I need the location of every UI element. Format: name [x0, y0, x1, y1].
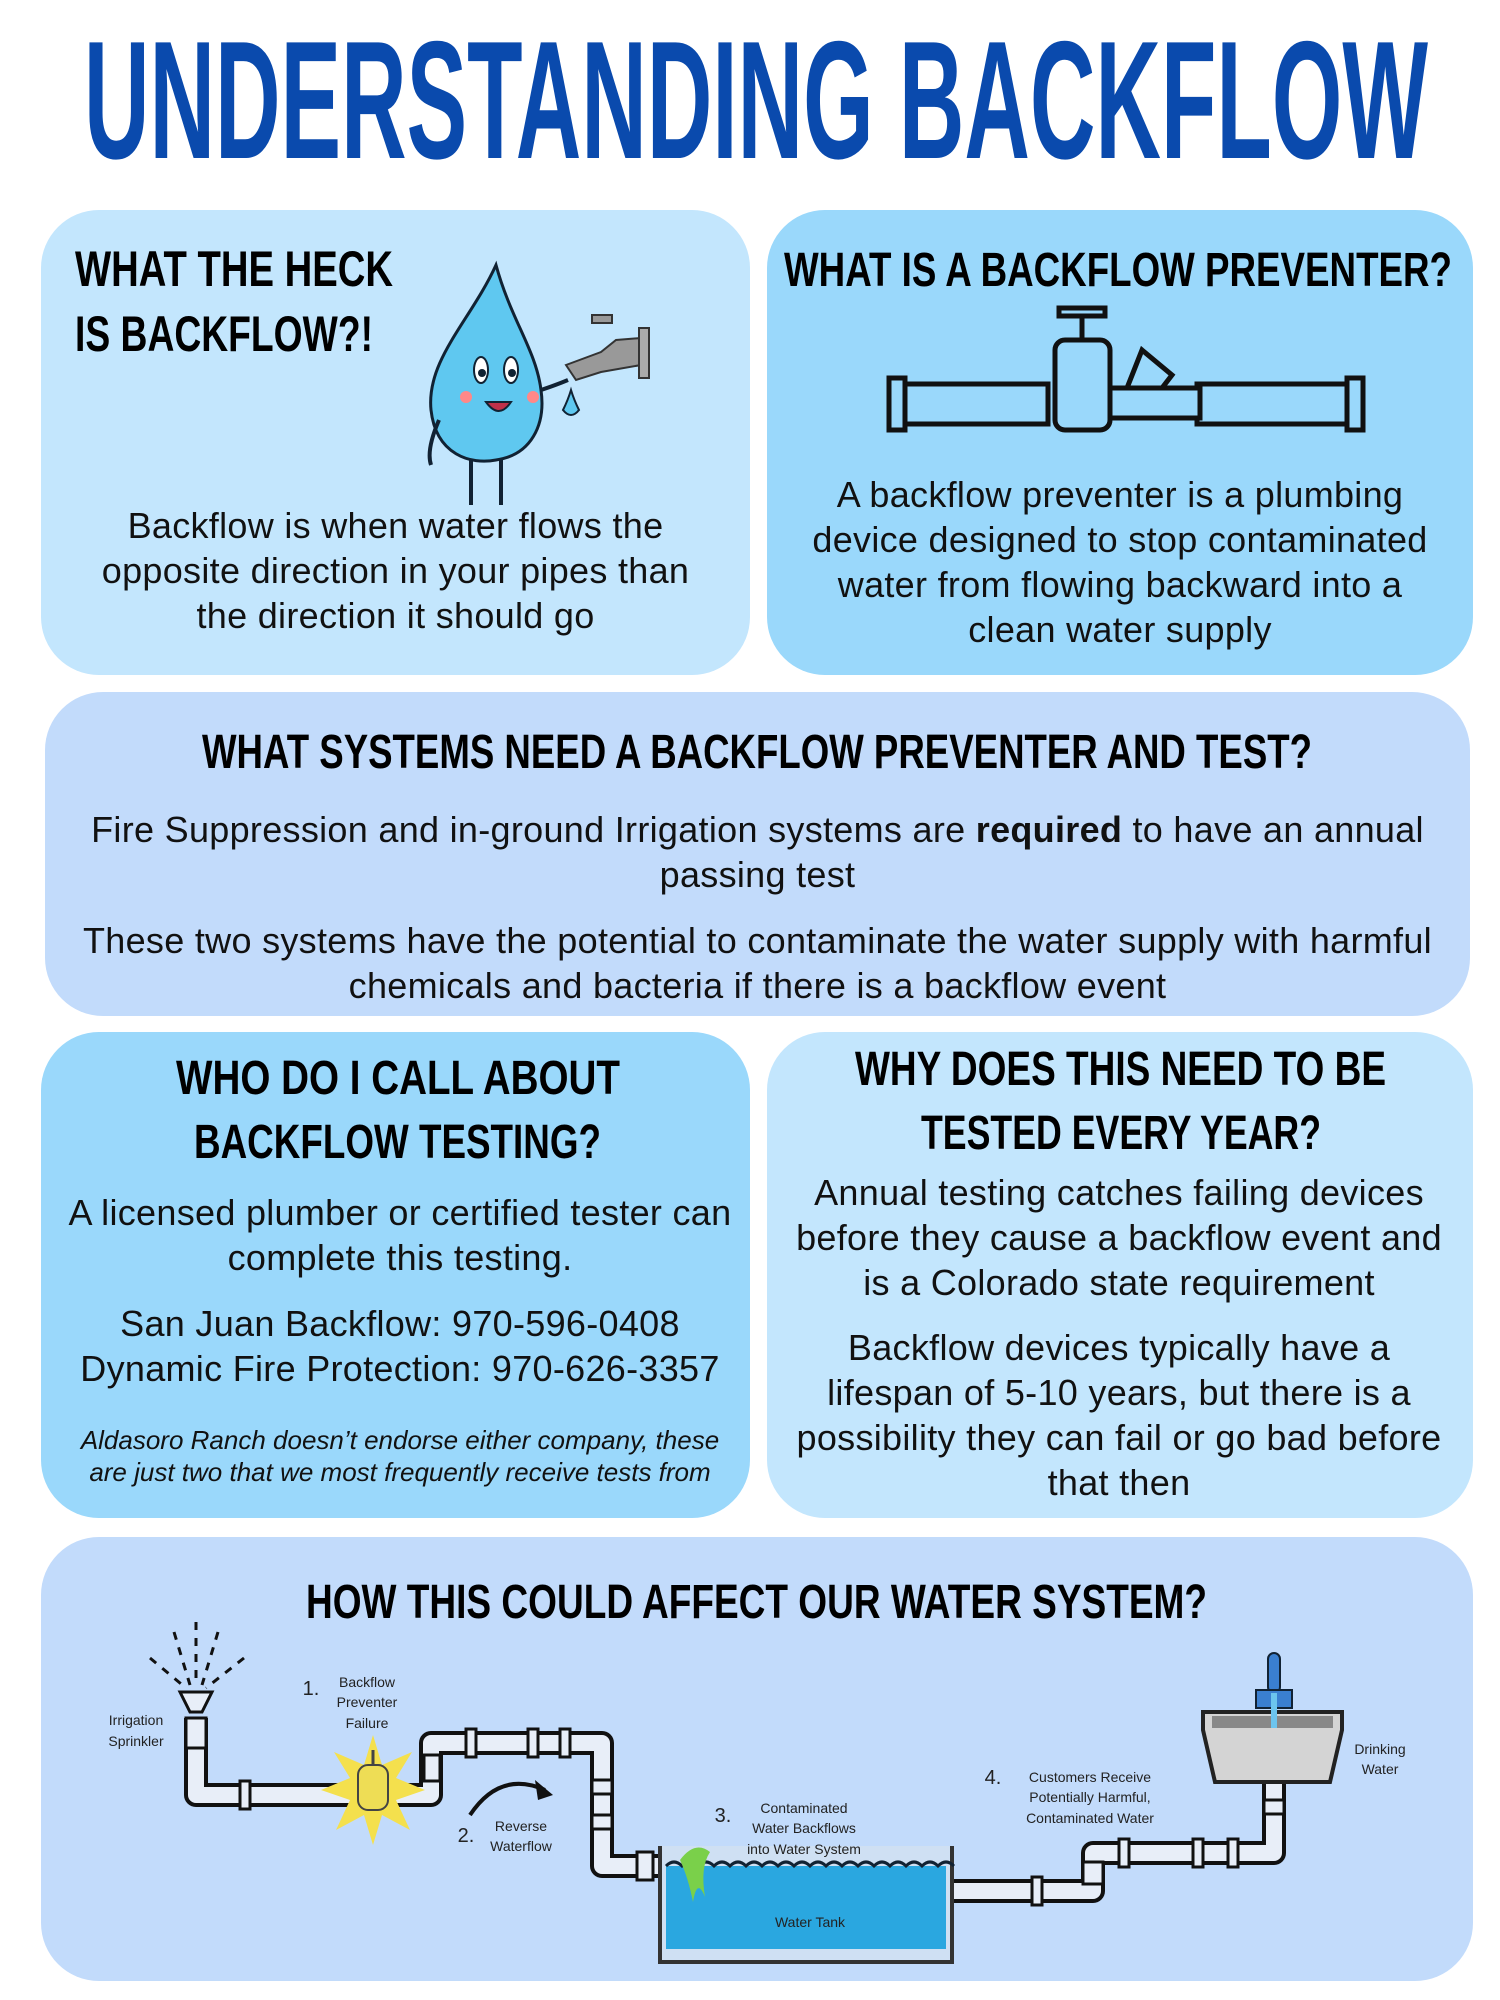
- text block: before they cause a backflow event and: [796, 1217, 1442, 1258]
- panel: what systems need: [45, 692, 1470, 1016]
- disclaimer: are just two that we most frequently receive tests from: [89, 1457, 711, 1487]
- disclaimer: [80, 1425, 719, 1487]
- labels: Failure: [346, 1715, 389, 1731]
- labels: Contaminated Water: [1026, 1810, 1154, 1826]
- heading: what the heck: IS BACKFLOW?!: [75, 306, 373, 362]
- labels: Drinking: [1354, 1741, 1406, 1757]
- text block: complete this testing.: [228, 1237, 572, 1278]
- text block: [91, 809, 1424, 895]
- text block: water from flowing backward into a: [838, 564, 1402, 605]
- panel: how this could affect: [41, 1537, 1473, 1981]
- text block: A backflow preventer is a plumbing: [837, 474, 1403, 515]
- labels: Sprinkler: [108, 1733, 164, 1749]
- labels: 4.: [985, 1767, 1001, 1789]
- text block: [83, 920, 1432, 1006]
- panel: who do I call: [41, 1032, 750, 1518]
- labels: Customers Receive: [1029, 1769, 1151, 1785]
- labels: Waterflow: [490, 1838, 553, 1854]
- icon: sprinkler spray: [150, 1622, 244, 1688]
- text block: that then: [1048, 1462, 1190, 1503]
- text block: [68, 1192, 731, 1278]
- heading: [784, 244, 1452, 432]
- labels: 3.: [715, 1805, 731, 1827]
- text block: clean water supply: [968, 609, 1272, 650]
- arrow: reverse flow: [470, 1780, 553, 1815]
- text block: chemicals and bacteria if there is a backflow event: [349, 965, 1166, 1006]
- labels: Water Tank: [775, 1914, 846, 1930]
- heading: [855, 1043, 1386, 1160]
- icon: water drop with faucet: [428, 260, 650, 505]
- labels: Water Backflows: [752, 1820, 856, 1836]
- text block: [102, 505, 689, 636]
- heading: [176, 1052, 620, 1169]
- labels: Reverse: [495, 1818, 547, 1834]
- text block: Backflow devices typically have a: [848, 1327, 1390, 1368]
- icon: water tank: [660, 1846, 954, 1962]
- icon: sprinkler head: [180, 1692, 212, 1712]
- panel: what is backflow: [41, 210, 750, 675]
- labels: Contaminated: [760, 1800, 848, 1816]
- labels: Water: [1362, 1761, 1399, 1777]
- panel: backflow preventer: [767, 210, 1473, 675]
- heading: TESTED EVERY YEAR?: [921, 1107, 1321, 1160]
- text block: Fire Suppression and in-ground Irrigation systems are required to have an annual: [91, 809, 1424, 850]
- icon: failing valve starburst: [321, 1735, 425, 1845]
- heading: what the heck: WHAT THE HECK: [75, 241, 393, 297]
- labels: Backflow: [339, 1674, 396, 1690]
- text block: Annual testing catches failing devices: [814, 1172, 1424, 1213]
- contacts: San Juan Backflow: 970-596-0408: [120, 1303, 680, 1344]
- text block: the direction it should go: [196, 595, 595, 636]
- text block: [812, 474, 1428, 650]
- text block: device designed to stop contaminated: [812, 519, 1428, 560]
- text block: Backflow is when water flows the: [128, 505, 663, 546]
- text block: passing test: [660, 854, 855, 895]
- heading: WHO DO I CALL ABOUT: [176, 1052, 620, 1105]
- pipes: [196, 1718, 1274, 1891]
- labels: Potentially Harmful,: [1029, 1789, 1151, 1805]
- text block: opposite direction in your pipes than: [102, 550, 689, 591]
- text block: [796, 1172, 1442, 1303]
- text block: is a Colorado state requirement: [863, 1262, 1375, 1303]
- labels: [108, 1674, 1406, 1930]
- heading: BACKFLOW TESTING?: [194, 1116, 601, 1169]
- disclaimer: Aldasoro Ranch doesn’t endorse either company, these: [81, 1425, 719, 1455]
- labels: 2.: [458, 1825, 474, 1847]
- icon: sink and faucet: [1203, 1653, 1342, 1782]
- labels: Preventer: [337, 1694, 398, 1710]
- text block: A licensed plumber or certified tester can: [69, 1192, 731, 1233]
- icon: backflow preventer pipe: [889, 308, 1363, 430]
- heading: HOW THIS COULD AFFECT OUR WATER SYSTEM?: [306, 1576, 1207, 1629]
- text block: possibility they can fail or go bad before: [796, 1417, 1441, 1458]
- heading: what the heck: [75, 241, 393, 362]
- panel: why tested every year: [767, 1032, 1473, 1518]
- text block: lifespan of 5-10 years, but there is a: [827, 1372, 1411, 1413]
- text block: [796, 1327, 1441, 1503]
- text block: These two systems have the potential to contaminate the water supply with harmful: [83, 920, 1432, 961]
- contacts: [80, 1303, 720, 1389]
- labels: 1.: [303, 1678, 319, 1700]
- contacts: Dynamic Fire Protection: 970-626-3357: [80, 1348, 720, 1389]
- labels: into Water System: [747, 1841, 861, 1857]
- labels: Irrigation: [109, 1712, 163, 1728]
